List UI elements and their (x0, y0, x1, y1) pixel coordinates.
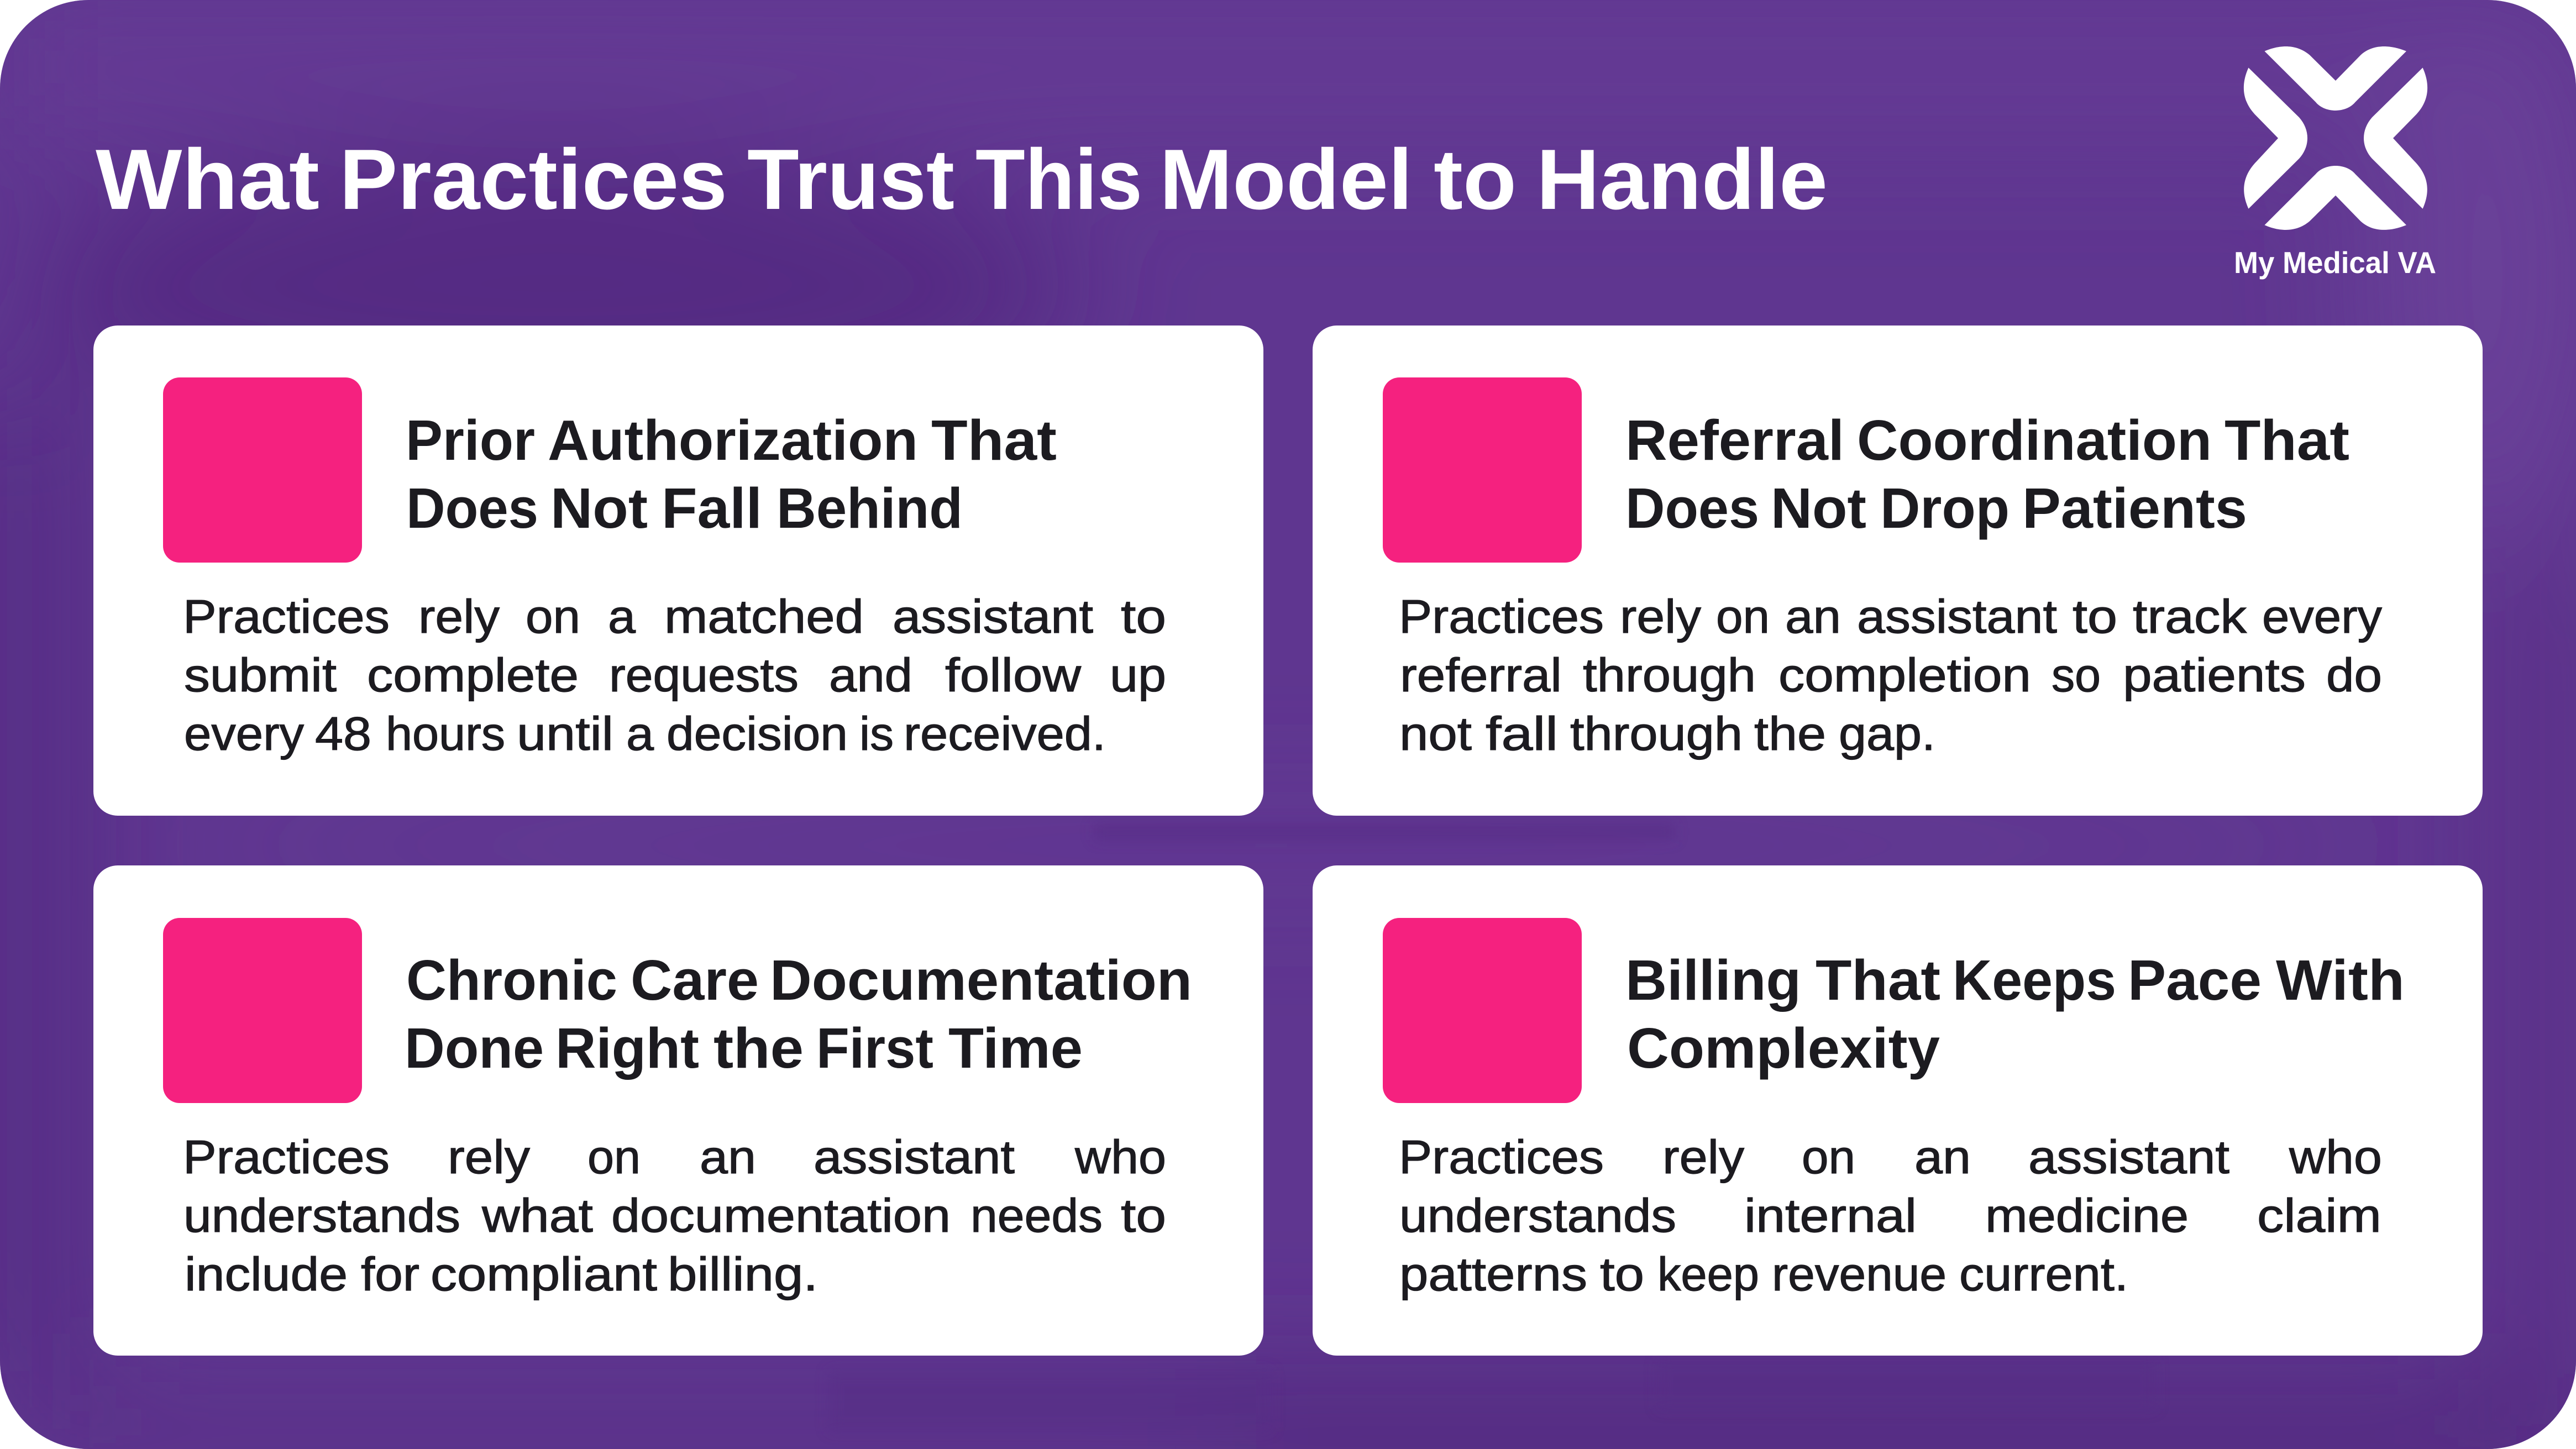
body text: chronic care documentation: billing. (668, 1248, 818, 1301)
heading: prior authorization: Fall (662, 476, 762, 540)
body text: chronic care documentation: needs (970, 1190, 1103, 1242)
heading: billing: Keeps (1953, 948, 2116, 1012)
body text: prior authorization: on (526, 591, 580, 643)
body text: chronic care documentation: to (1121, 1190, 1166, 1242)
title: Handle (1536, 132, 1828, 227)
body text: billing: revenue (1772, 1248, 1947, 1301)
title: to (1434, 132, 1517, 227)
heading: prior authorization (406, 408, 1057, 540)
heading: billing: That (1816, 948, 1940, 1012)
heading: prior authorization: Authorization (548, 408, 918, 472)
body text: referral coordination: Practices (1399, 591, 1604, 643)
body text: referral coordination: assistant (1857, 591, 2057, 643)
body text: prior authorization: and (829, 649, 912, 702)
logo wordmark: My Medical VA (2234, 245, 2436, 280)
body text: prior authorization: up (1110, 649, 1166, 702)
heading: chronic care documentation: Time (948, 1016, 1083, 1080)
body text: prior authorization (183, 591, 1166, 760)
body text: chronic care documentation: understands (183, 1190, 460, 1242)
body text: referral coordination: on (1716, 591, 1770, 643)
heading: billing: Complexity (1627, 1016, 1940, 1080)
heading: chronic care documentation (405, 948, 1192, 1080)
body text: prior authorization: complete (367, 649, 579, 702)
body text: billing: on (1802, 1131, 1855, 1184)
body text: prior authorization: a (608, 591, 636, 643)
body text: chronic care documentation: documentation (611, 1190, 951, 1242)
body text: billing: understands (1399, 1190, 1676, 1242)
heading: chronic care documentation: Care (631, 948, 759, 1012)
body text: prior authorization: Practices (183, 591, 390, 643)
body text: prior authorization: decision (667, 708, 848, 760)
heading: referral coordination: That (2225, 408, 2349, 472)
body text: referral coordination: not (1399, 708, 1472, 760)
body text: prior authorization: a (626, 708, 654, 760)
body text: billing: to (1600, 1248, 1644, 1301)
body text: billing: assistant (2028, 1131, 2229, 1184)
heading: chronic care documentation: the (713, 1016, 804, 1080)
heading: referral coordination: Does (1625, 476, 1759, 540)
heading: billing: With (2276, 948, 2405, 1012)
body text: referral coordination: the (1754, 708, 1826, 760)
body text: referral coordination: gap. (1839, 708, 1935, 760)
body text: prior authorization: follow (945, 649, 1082, 702)
panel: chronic care documentation (93, 865, 1263, 1356)
body text: billing: Practices (1399, 1131, 1604, 1184)
title: This (975, 132, 1142, 227)
body text: billing: an (1914, 1131, 1971, 1184)
heading: billing: Billing (1625, 948, 1801, 1012)
body text: chronic care documentation: include (185, 1248, 348, 1301)
body text: referral coordination: track (2133, 591, 2247, 643)
body text: chronic care documentation: Practices (183, 1131, 390, 1184)
body text: prior authorization: is (859, 708, 894, 760)
body text: referral coordination: an (1785, 591, 1841, 643)
body text: referral coordination (1399, 591, 2383, 760)
heading: chronic care documentation: Right (555, 1016, 699, 1080)
body text: chronic care documentation: who (1074, 1131, 1166, 1184)
body text: billing: medicine (1985, 1190, 2189, 1242)
heading: billing (1625, 948, 2405, 1080)
body text: referral coordination: so (2052, 649, 2101, 702)
body text: referral coordination: patients (2123, 649, 2306, 702)
body text: referral coordination: fall (1486, 708, 1558, 760)
body text: billing (1399, 1131, 2382, 1301)
body text: billing: who (2289, 1131, 2382, 1184)
heading: referral coordination: Coordination (1857, 408, 2212, 472)
icon tile: pink square (1383, 377, 1582, 563)
heading: referral coordination: Referral (1625, 408, 1844, 472)
body text: referral coordination: through (1570, 708, 1743, 760)
title: Model (1160, 132, 1413, 227)
heading: referral coordination (1625, 408, 2349, 540)
body text: chronic care documentation: assistant (814, 1131, 1015, 1184)
panel: billing (1313, 865, 2483, 1356)
body text: prior authorization: requests (609, 649, 799, 702)
logo: My Medical VA (2234, 46, 2436, 280)
title: What (96, 132, 319, 227)
heading: billing: Pace (2128, 948, 2262, 1012)
panel: referral coordination (1313, 326, 2483, 816)
body text: prior authorization: submit (184, 649, 337, 702)
body text: prior authorization: to (1121, 591, 1166, 643)
heading: referral coordination: Patients (2022, 476, 2247, 540)
body text: prior authorization: received. (904, 708, 1106, 760)
body text: prior authorization: until (517, 708, 613, 760)
title (96, 132, 1828, 227)
body text: billing: rely (1662, 1131, 1745, 1184)
title: Practices (339, 132, 727, 227)
body text: prior authorization: rely (418, 591, 500, 643)
body text: prior authorization: matched (664, 591, 864, 643)
body text: referral coordination: to (2073, 591, 2117, 643)
heading: referral coordination: Not (1771, 476, 1866, 540)
body text: referral coordination: rely (1620, 591, 1702, 643)
body text: chronic care documentation: compliant (431, 1248, 657, 1301)
body text: referral coordination: do (2326, 649, 2382, 702)
body text: referral coordination: completion (1778, 649, 2031, 702)
body text: chronic care documentation: what (481, 1190, 593, 1242)
body text: billing: internal (1744, 1190, 1917, 1242)
heading: prior authorization: Does (406, 476, 538, 540)
heading: chronic care documentation: Documentation (770, 948, 1192, 1012)
body text: chronic care documentation: for (361, 1248, 419, 1301)
body text: billing: claim (2257, 1190, 2381, 1242)
icon tile: pink square (1383, 918, 1582, 1103)
heading: prior authorization: Not (550, 476, 648, 540)
icon: logo mark (2244, 46, 2427, 230)
heading: referral coordination: Drop (1880, 476, 2010, 540)
panel: prior authorization (93, 326, 1263, 816)
body text: billing: patterns (1399, 1248, 1587, 1301)
heading: prior authorization: Prior (406, 408, 535, 472)
body text: prior authorization: hours (386, 708, 505, 760)
body text: prior authorization: 48 (315, 708, 371, 760)
body text: chronic care documentation (183, 1131, 1166, 1301)
heading: chronic care documentation: First (816, 1016, 933, 1080)
body text: referral coordination: through (1583, 649, 1756, 702)
body text: referral coordination: referral (1400, 649, 1562, 702)
body text: chronic care documentation: rely (448, 1131, 531, 1184)
body text: referral coordination: every (2262, 591, 2383, 643)
body text: prior authorization: every (184, 708, 305, 760)
heading: chronic care documentation: Chronic (406, 948, 617, 1012)
body text: chronic care documentation: an (700, 1131, 756, 1184)
heading: prior authorization: That (931, 408, 1057, 472)
icon tile: pink square (163, 918, 362, 1103)
icon tile: pink square (163, 377, 362, 563)
body text: prior authorization: assistant (893, 591, 1093, 643)
body text: billing: current. (1959, 1248, 2128, 1301)
heading: chronic care documentation: Done (405, 1016, 544, 1080)
body text: billing: keep (1657, 1248, 1759, 1301)
body text: chronic care documentation: on (587, 1131, 641, 1184)
heading: prior authorization: Behind (777, 476, 963, 540)
title: Trust (747, 132, 954, 227)
